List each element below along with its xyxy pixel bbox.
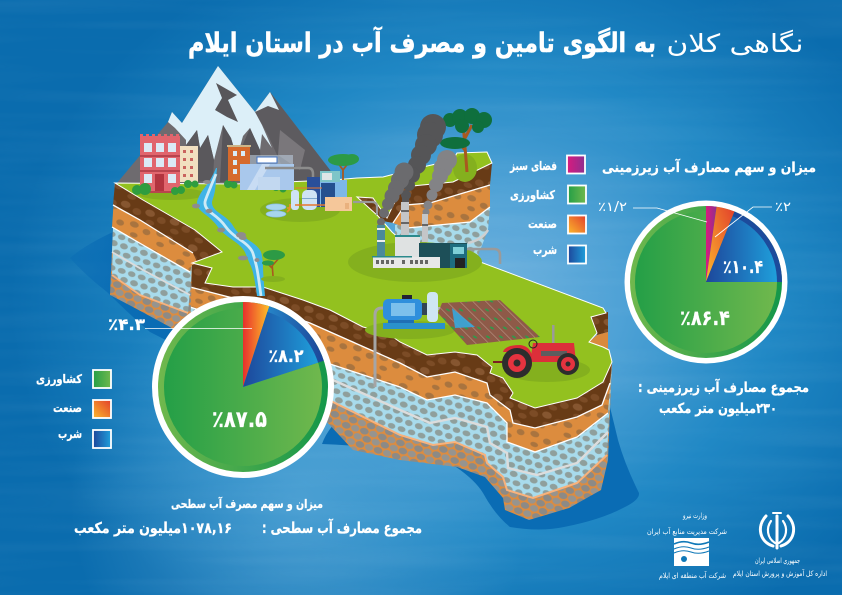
settling pools	[266, 204, 290, 217]
text: surface water caption: میزان و سهم مصرف آب سطحی	[171, 496, 323, 512]
icon: national emblem	[760, 513, 794, 548]
green land surface	[115, 152, 612, 408]
logo: education department	[733, 513, 827, 578]
logo text: regional company: شرکت آب منطقه ای ایلام	[659, 570, 726, 580]
callout: 2 percent: ٪۲	[775, 200, 791, 215]
dark water shadow under island	[70, 232, 639, 530]
title bold part: به الگوی تامین و مصرف آب در استان ایلام	[188, 26, 656, 59]
smoke: left	[377, 162, 414, 226]
legend swatch: agriculture	[568, 186, 586, 204]
tree: large pine on mound	[440, 108, 492, 172]
pie chart: surface water use	[152, 296, 334, 478]
pink apartment building	[140, 134, 198, 193]
legend label: industry: صنعت	[528, 217, 557, 231]
legend label: green space: فضای سبز	[509, 159, 557, 173]
legend swatch: agriculture	[93, 370, 111, 388]
text: surface water total: ۱۰۷۸,۱۶میلیون متر مکعب	[74, 519, 232, 537]
pie chart: groundwater use	[624, 200, 788, 364]
river rocks	[192, 180, 260, 262]
legend label: agriculture: کشاورزی	[510, 188, 555, 203]
value: drinking: ٪۸.۲	[268, 346, 304, 367]
back strata behind factory	[357, 163, 492, 264]
text: groundwater total: ۲۳۰میلیون متر مکعب	[659, 401, 777, 417]
slice: drinking	[243, 312, 318, 387]
water pump	[383, 292, 452, 329]
legend label: drinking: شرب	[58, 427, 82, 441]
slice: drinking	[706, 216, 777, 282]
value: agriculture: ٪۸۷.۵	[212, 407, 267, 433]
blue industrial building and tanks	[291, 171, 377, 215]
well pipe	[375, 308, 385, 387]
callout: 1.2 percent	[598, 200, 707, 222]
tree: near mountain	[328, 154, 359, 180]
callout: 1.2 percent: ٪۱/۲	[598, 200, 627, 215]
right notch strata	[589, 312, 608, 350]
text: surface water total	[74, 519, 422, 537]
text: groundwater total	[638, 378, 809, 417]
left strata layers	[110, 183, 222, 340]
value: agriculture: ٪۸۶.۴	[680, 306, 730, 330]
smoke plumes	[377, 114, 457, 226]
legend swatch: industry	[93, 400, 111, 418]
legend swatch: drinking	[568, 246, 586, 264]
legend label: agriculture: کشاورزی	[36, 372, 82, 387]
slice: industry	[706, 207, 734, 282]
factory	[372, 202, 500, 268]
island illustration	[110, 66, 612, 520]
tree: by river	[261, 250, 285, 282]
orange building	[227, 145, 251, 181]
logo: water company	[647, 511, 727, 580]
glass water treatment building	[240, 155, 313, 190]
tractor	[493, 325, 579, 378]
text: groundwater total: مجموع مصارف آب زیرزمینی :	[638, 378, 809, 396]
callout: 2 percent	[715, 200, 791, 237]
panel: surface water legend	[36, 370, 111, 448]
ground shadows	[138, 154, 590, 382]
icon: water waves	[674, 538, 709, 566]
value: drinking: ٪۱۰.۴	[723, 257, 763, 278]
legend swatch: drinking	[93, 430, 111, 448]
legend swatch: industry	[568, 216, 586, 234]
title light part: نگاهی کلان	[666, 29, 804, 58]
text: surface water total: مجموع مصارف آب سطحی :	[262, 519, 422, 537]
legend label: industry: صنعت	[53, 401, 82, 415]
river	[197, 168, 265, 296]
smoke: right	[422, 150, 457, 216]
heading: groundwater: میزان و سهم مصارف آب زیرزمینی	[602, 158, 816, 176]
logo text: republic: جمهوری اسلامی ایران	[755, 556, 800, 565]
bushes	[132, 180, 286, 195]
legend swatch: green space	[567, 156, 585, 174]
callout: 4.3 percent: ٪۴.۳	[108, 315, 145, 334]
crop field	[438, 300, 540, 345]
legend label: drinking: شرب	[533, 243, 557, 257]
slice: green space 2 percent	[706, 206, 717, 282]
front strata layers	[190, 263, 612, 520]
mountains	[117, 66, 336, 184]
logo text: ministry: وزارت نیرو	[682, 511, 707, 520]
panel: groundwater legend	[509, 156, 586, 264]
title	[188, 26, 804, 59]
slice: drinking rim	[243, 306, 324, 387]
slice: industry	[243, 302, 269, 387]
slice: drinking rim	[706, 212, 782, 282]
logo text: resources company: شرکت مدیریت منابع آب ایران	[647, 526, 727, 536]
smoke: middle	[401, 114, 446, 205]
